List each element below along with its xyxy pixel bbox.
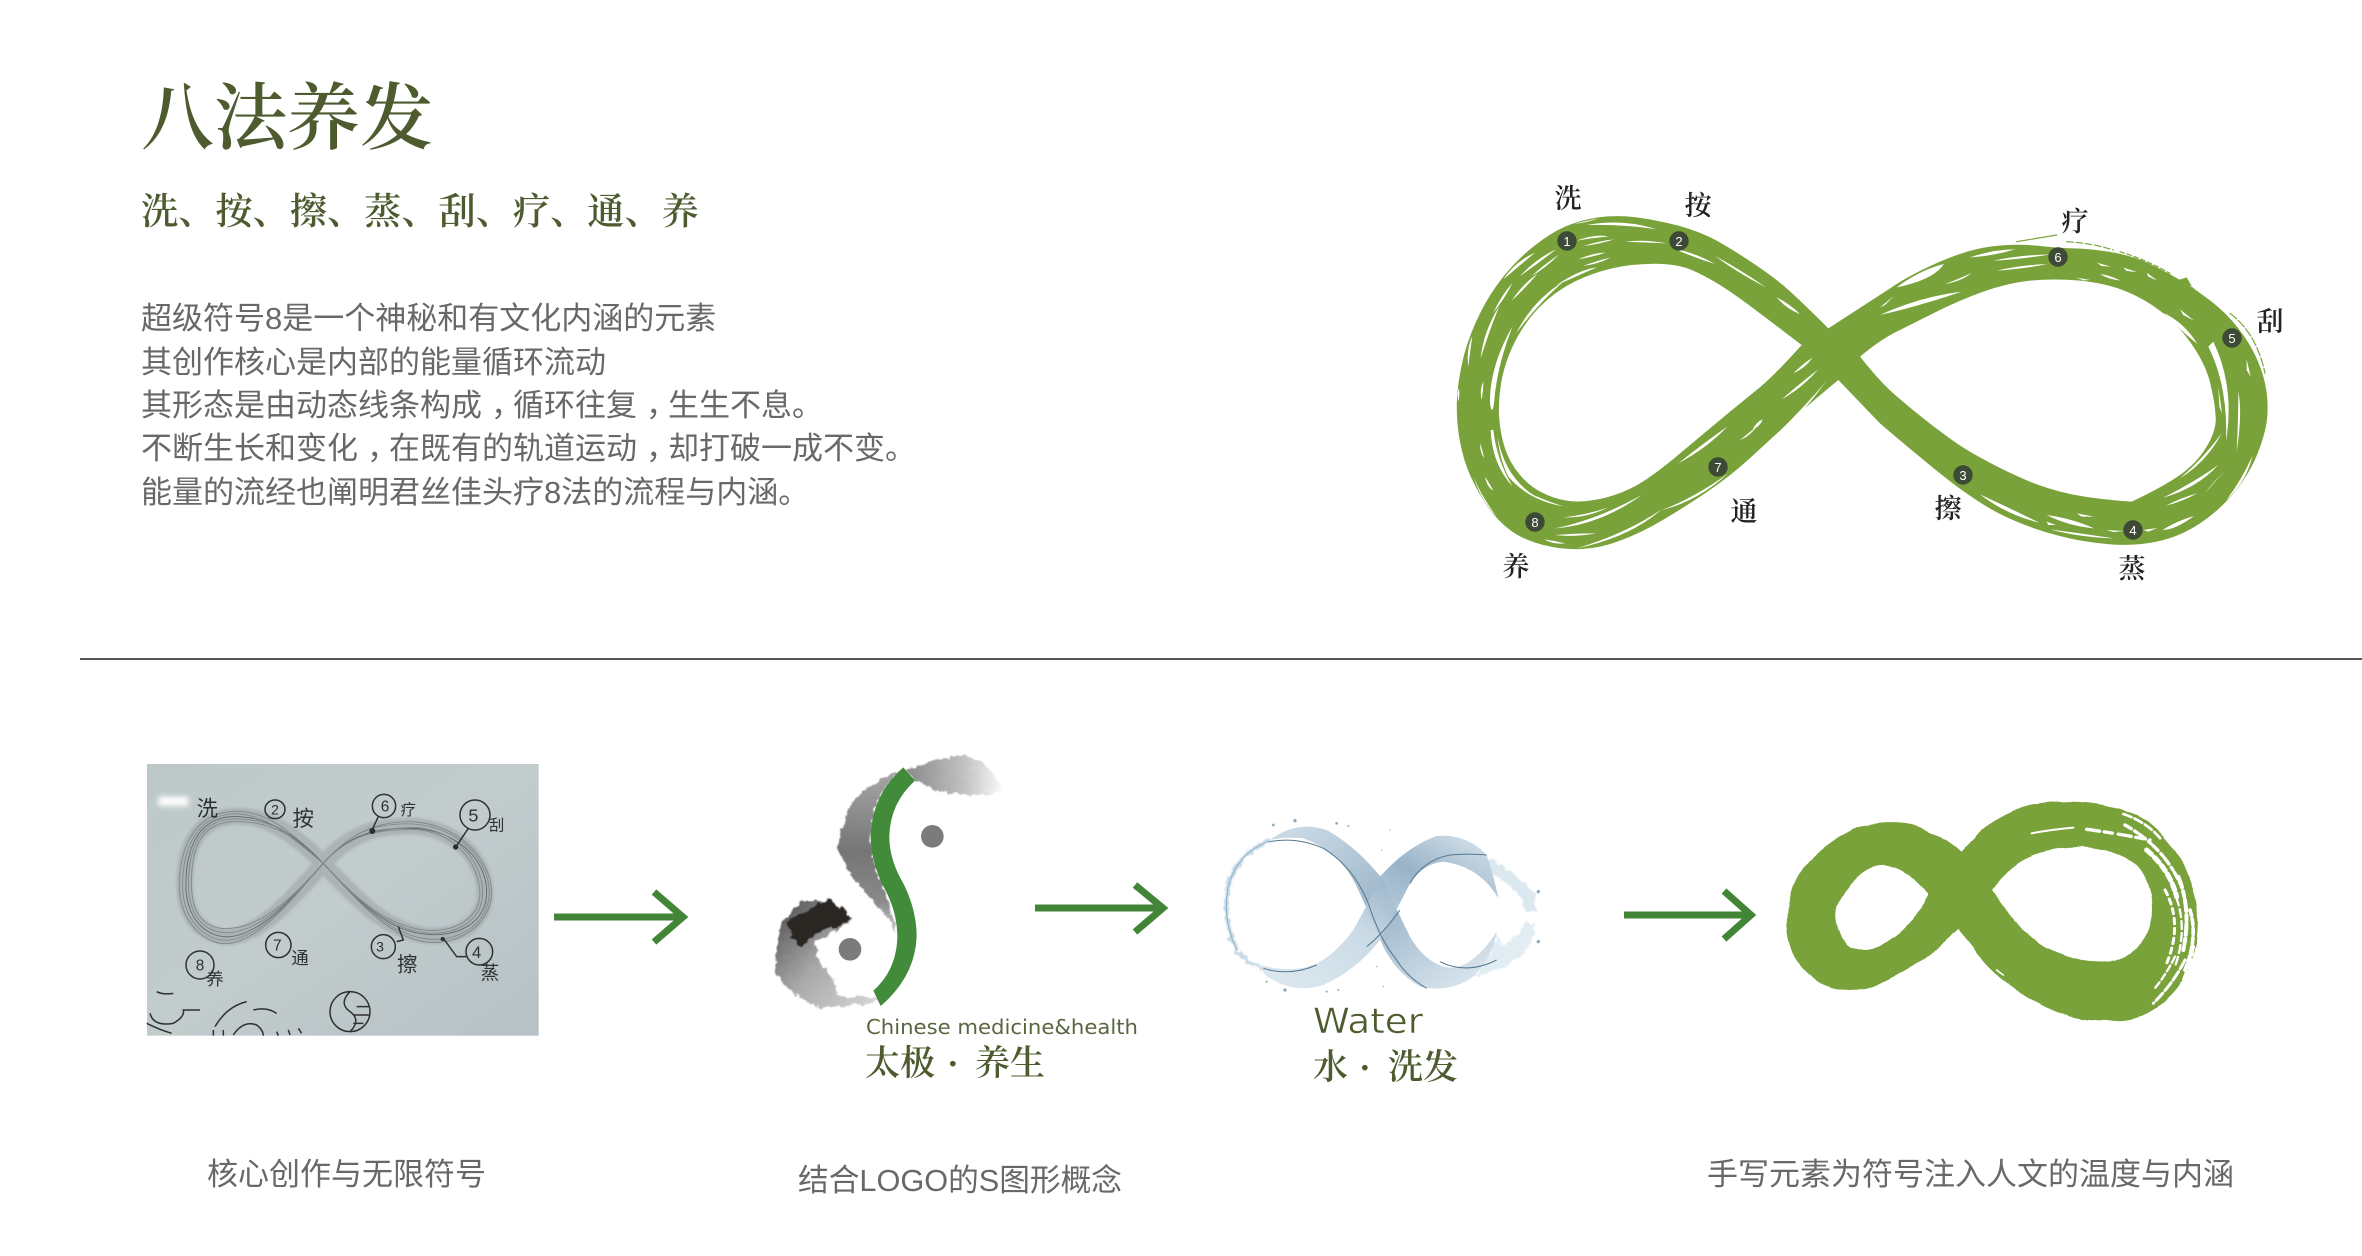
- method labels: 洗: [1554, 184, 1582, 214]
- logo chinese: 养生: [975, 1044, 1045, 1083]
- method labels: [1502, 184, 2284, 584]
- taiji dots: [839, 825, 944, 961]
- method labels: 通: [1730, 497, 1758, 527]
- arrow 1: [554, 892, 683, 942]
- arrow 2: [1035, 885, 1163, 932]
- photo: whiteboard sketch: 疗: [401, 802, 416, 819]
- photo: whiteboard sketch: 4: [472, 943, 481, 962]
- logo english: Chinese medicine&health: [866, 1015, 1138, 1039]
- subtitle: eight methods: 洗、按、擦、蒸、刮、疗、通、养: [141, 191, 699, 233]
- numbered dots: 7: [1714, 460, 1722, 475]
- logo chinese: [865, 1044, 1045, 1083]
- numbered dots: 2: [1675, 234, 1683, 249]
- photo: whiteboard sketch: 6: [381, 798, 389, 815]
- photo: whiteboard sketch: 按: [293, 807, 314, 831]
- body text: [141, 301, 916, 510]
- numbered dots: 8: [1531, 515, 1539, 530]
- green S: [871, 767, 917, 1006]
- upper ink stroke: [837, 755, 1003, 935]
- water chinese: 水: [1313, 1048, 1348, 1087]
- body text: 能量的流经也阐明君丝佳头疗8法的流程与内涵。: [141, 475, 809, 510]
- method labels: 擦: [1934, 494, 1962, 524]
- photo: whiteboard sketch: 刮: [489, 818, 504, 835]
- body text: 不断生长和变化 ，在既有的轨道运动 ，却打破一成不变。: [141, 431, 916, 466]
- method labels: 按: [1684, 191, 1714, 221]
- photo: whiteboard sketch: 8: [196, 958, 204, 975]
- lower ink stroke: [776, 899, 880, 1008]
- title: 八法养发: [141, 78, 433, 159]
- photo: whiteboard sketch: 蒸: [481, 962, 499, 983]
- caption 2: 结合LOGO的S图形概念: [798, 1163, 1122, 1198]
- water infinity: [1226, 819, 1540, 1087]
- photo: whiteboard sketch: 3: [376, 938, 384, 954]
- photo: whiteboard sketch: 养: [206, 969, 224, 989]
- handwritten green infinity: [1786, 802, 2198, 1021]
- numbered dots: 6: [2054, 250, 2062, 265]
- water chinese: ·: [1359, 1048, 1371, 1087]
- infinity brush loop: [1457, 216, 2268, 549]
- method labels: 养: [1502, 552, 1530, 582]
- chart: infinity diagram of eight methods: [1457, 184, 2284, 584]
- photo: whiteboard sketch: 擦: [397, 953, 418, 976]
- body text: 其形态是由动态线条构成 ，循环往复 ，生生不息。: [141, 388, 823, 423]
- caption 1: 核心创作与无限符号: [207, 1157, 486, 1192]
- photo: whiteboard sketch: 7: [273, 938, 282, 955]
- numbered dots: 4: [2129, 523, 2137, 538]
- arrow 3: [1624, 891, 1751, 939]
- divider line: [80, 658, 2362, 660]
- numbered dots: 3: [1959, 468, 1967, 483]
- water arcs: [1226, 841, 1537, 977]
- numbered dots: [1525, 231, 2242, 540]
- method labels: 疗: [2062, 207, 2088, 237]
- photo: whiteboard sketch: [147, 764, 539, 1036]
- photo: whiteboard sketch: 通: [291, 948, 309, 968]
- numbered dots: 5: [2228, 331, 2236, 346]
- logo chinese: ·: [947, 1044, 959, 1083]
- method labels: 蒸: [2118, 554, 2146, 584]
- caption 3: 手写元素为符号注入人文的温度与内涵: [1707, 1157, 2234, 1192]
- water english: Water: [1313, 1002, 1424, 1042]
- body text: 超级符号8是一个神秘和有文化内涵的元素: [141, 301, 716, 336]
- photo: whiteboard sketch: 2: [271, 802, 279, 818]
- body text: 其创作核心是内部的能量循环流动: [141, 345, 606, 380]
- photo: whiteboard sketch: 洗: [197, 797, 218, 821]
- water chinese: 洗发: [1388, 1048, 1458, 1087]
- taiji S logo: [776, 755, 1138, 1083]
- method labels: 刮: [2256, 307, 2284, 337]
- logo chinese: 太极: [865, 1044, 935, 1083]
- photo: whiteboard sketch: 5: [468, 805, 478, 825]
- numbered dots: 1: [1563, 234, 1571, 249]
- water chinese: [1313, 1048, 1458, 1087]
